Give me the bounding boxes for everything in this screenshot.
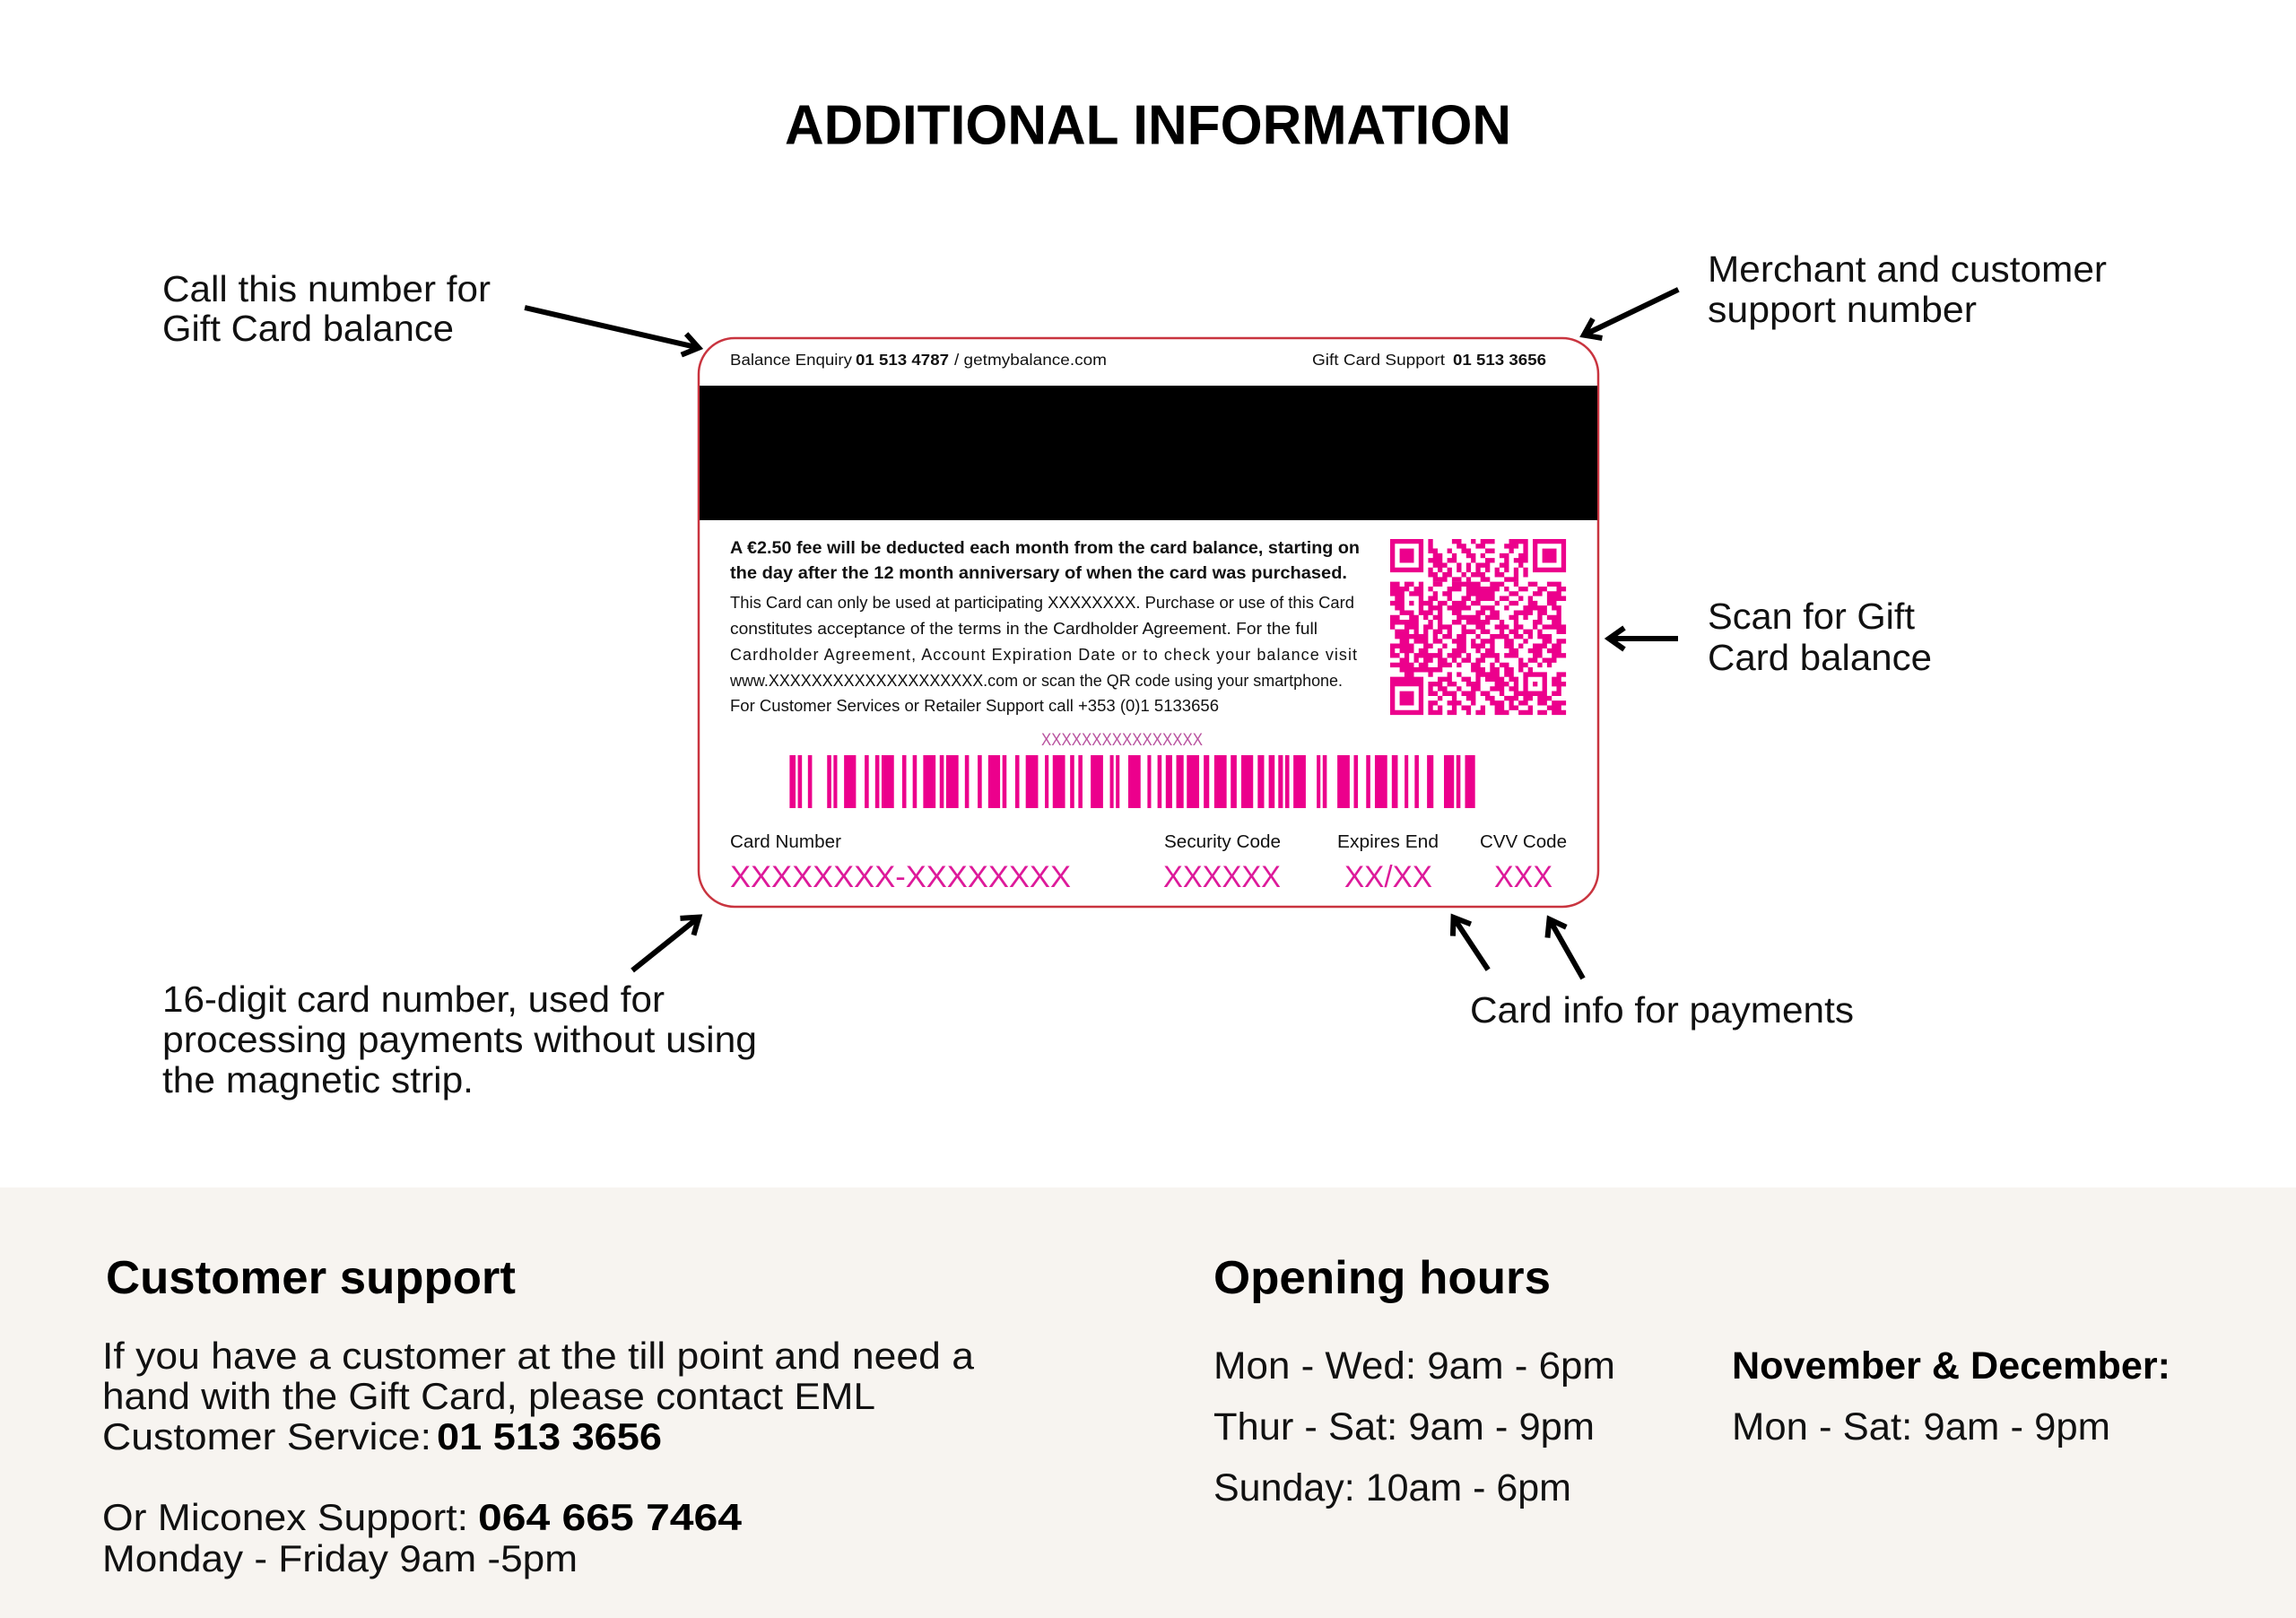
fee notice: the day after the 12 month anniversary of when the card was purchased. [730, 563, 1347, 583]
balance enquiry line: / getmybalance.com [954, 351, 1107, 369]
customer support text: Or Miconex Support: [102, 1496, 468, 1538]
customer support text: Customer Service: [102, 1415, 431, 1457]
heading: customer support: Customer support [106, 1252, 516, 1304]
heading: opening hours: Opening hours [1213, 1252, 1551, 1304]
callout: scan QR: Scan for Gift [1708, 596, 1916, 637]
arrow: to card number [626, 909, 706, 979]
callout: support number [1708, 248, 2107, 330]
balance enquiry line: 01 513 4787 [856, 351, 949, 369]
field labels: Security Code [1164, 832, 1281, 852]
field values: XXXXXXXX-XXXXXXXX [730, 860, 1071, 894]
standard opening hours: Sunday: 10am - 6pm [1213, 1466, 1571, 1509]
field labels: Card Number [730, 832, 841, 852]
title: ADDITIONAL INFORMATION [785, 95, 1511, 156]
field values: XXX [1494, 860, 1552, 894]
field values: XXXXXX [1163, 860, 1281, 894]
seasonal opening hours: November & December: [1732, 1344, 2170, 1387]
arrow: to balance enquiry [522, 297, 701, 358]
panel: gift card back [699, 338, 1598, 907]
arrow: to expiry [1445, 911, 1497, 976]
callout: 16-digit number: processing payments without using [162, 1019, 757, 1060]
gift card support line [1312, 351, 1546, 369]
customer support text: If you have a customer at the till point and need a [102, 1335, 975, 1377]
gift card support line: Gift Card Support [1312, 351, 1445, 369]
field labels: CVV Code [1480, 832, 1567, 852]
terms text: Cardholder Agreement, Account Expiration Date or to check your balance visit [730, 646, 1357, 664]
field labels [730, 832, 1567, 852]
callout: balance number [162, 268, 491, 349]
seasonal opening hours: Mon - Sat: 9am - 9pm [1732, 1405, 2110, 1448]
fee notice: A €2.50 fee will be deducted each month from the card balance, starting on [730, 538, 1360, 558]
arrow: to CVV [1540, 914, 1592, 984]
gift card support line: 01 513 3656 [1453, 351, 1546, 369]
barcode number: XXXXXXXXXXXXXXXX [1041, 731, 1203, 750]
standard opening hours [1213, 1344, 1615, 1509]
fee notice [730, 538, 1360, 583]
balance enquiry line [730, 351, 1107, 369]
customer support text: 064 665 7464 [478, 1496, 743, 1538]
customer support text: Monday - Friday 9am -5pm [102, 1537, 578, 1579]
arrow: to QR code [1609, 628, 1678, 649]
callout: balance number: Call this number for [162, 268, 491, 309]
arrow: to support number [1579, 280, 1683, 344]
standard opening hours: Thur - Sat: 9am - 9pm [1213, 1405, 1595, 1448]
customer support text: hand with the Gift Card, please contact EML [102, 1375, 875, 1417]
customer support text [102, 1335, 975, 1579]
callout: support number: Merchant and customer [1708, 248, 2107, 290]
magnetic strip [700, 386, 1597, 520]
field values [730, 860, 1552, 894]
callout: card info: Card info for payments [1470, 989, 1854, 1031]
balance enquiry line: Balance Enquiry [730, 351, 852, 369]
callout: scan QR: Card balance [1708, 637, 1932, 678]
QR code [1390, 539, 1566, 715]
terms text: constitutes acceptance of the terms in the Cardholder Agreement. For the full [730, 620, 1318, 638]
callout: 16-digit number: 16-digit card number, used for [162, 979, 665, 1020]
customer support text: 01 513 3656 [437, 1415, 662, 1457]
barcode [789, 755, 1475, 808]
terms text: For Customer Services or Retailer Support call +353 (0)1 5133656 [730, 697, 1219, 715]
field values: XX/XX [1344, 860, 1432, 894]
field labels: Expires End [1337, 832, 1439, 852]
terms text: This Card can only be used at participating XXXXXXXX. Purchase or use of this Card [730, 594, 1354, 612]
seasonal opening hours [1732, 1344, 2170, 1448]
callout: scan QR [1708, 596, 1932, 678]
callout: 16-digit number [162, 979, 757, 1100]
terms text [729, 594, 1357, 715]
callout: support number: support number [1708, 289, 1977, 330]
callout: balance number: Gift Card balance [162, 308, 454, 349]
standard opening hours: Mon - Wed: 9am - 6pm [1213, 1344, 1615, 1387]
terms text: www.XXXXXXXXXXXXXXXXXXXX.com or scan the QR code using your smartphone. [729, 672, 1343, 690]
callout: 16-digit number: the magnetic strip. [162, 1059, 474, 1100]
panel: footer background [0, 1187, 2296, 1618]
